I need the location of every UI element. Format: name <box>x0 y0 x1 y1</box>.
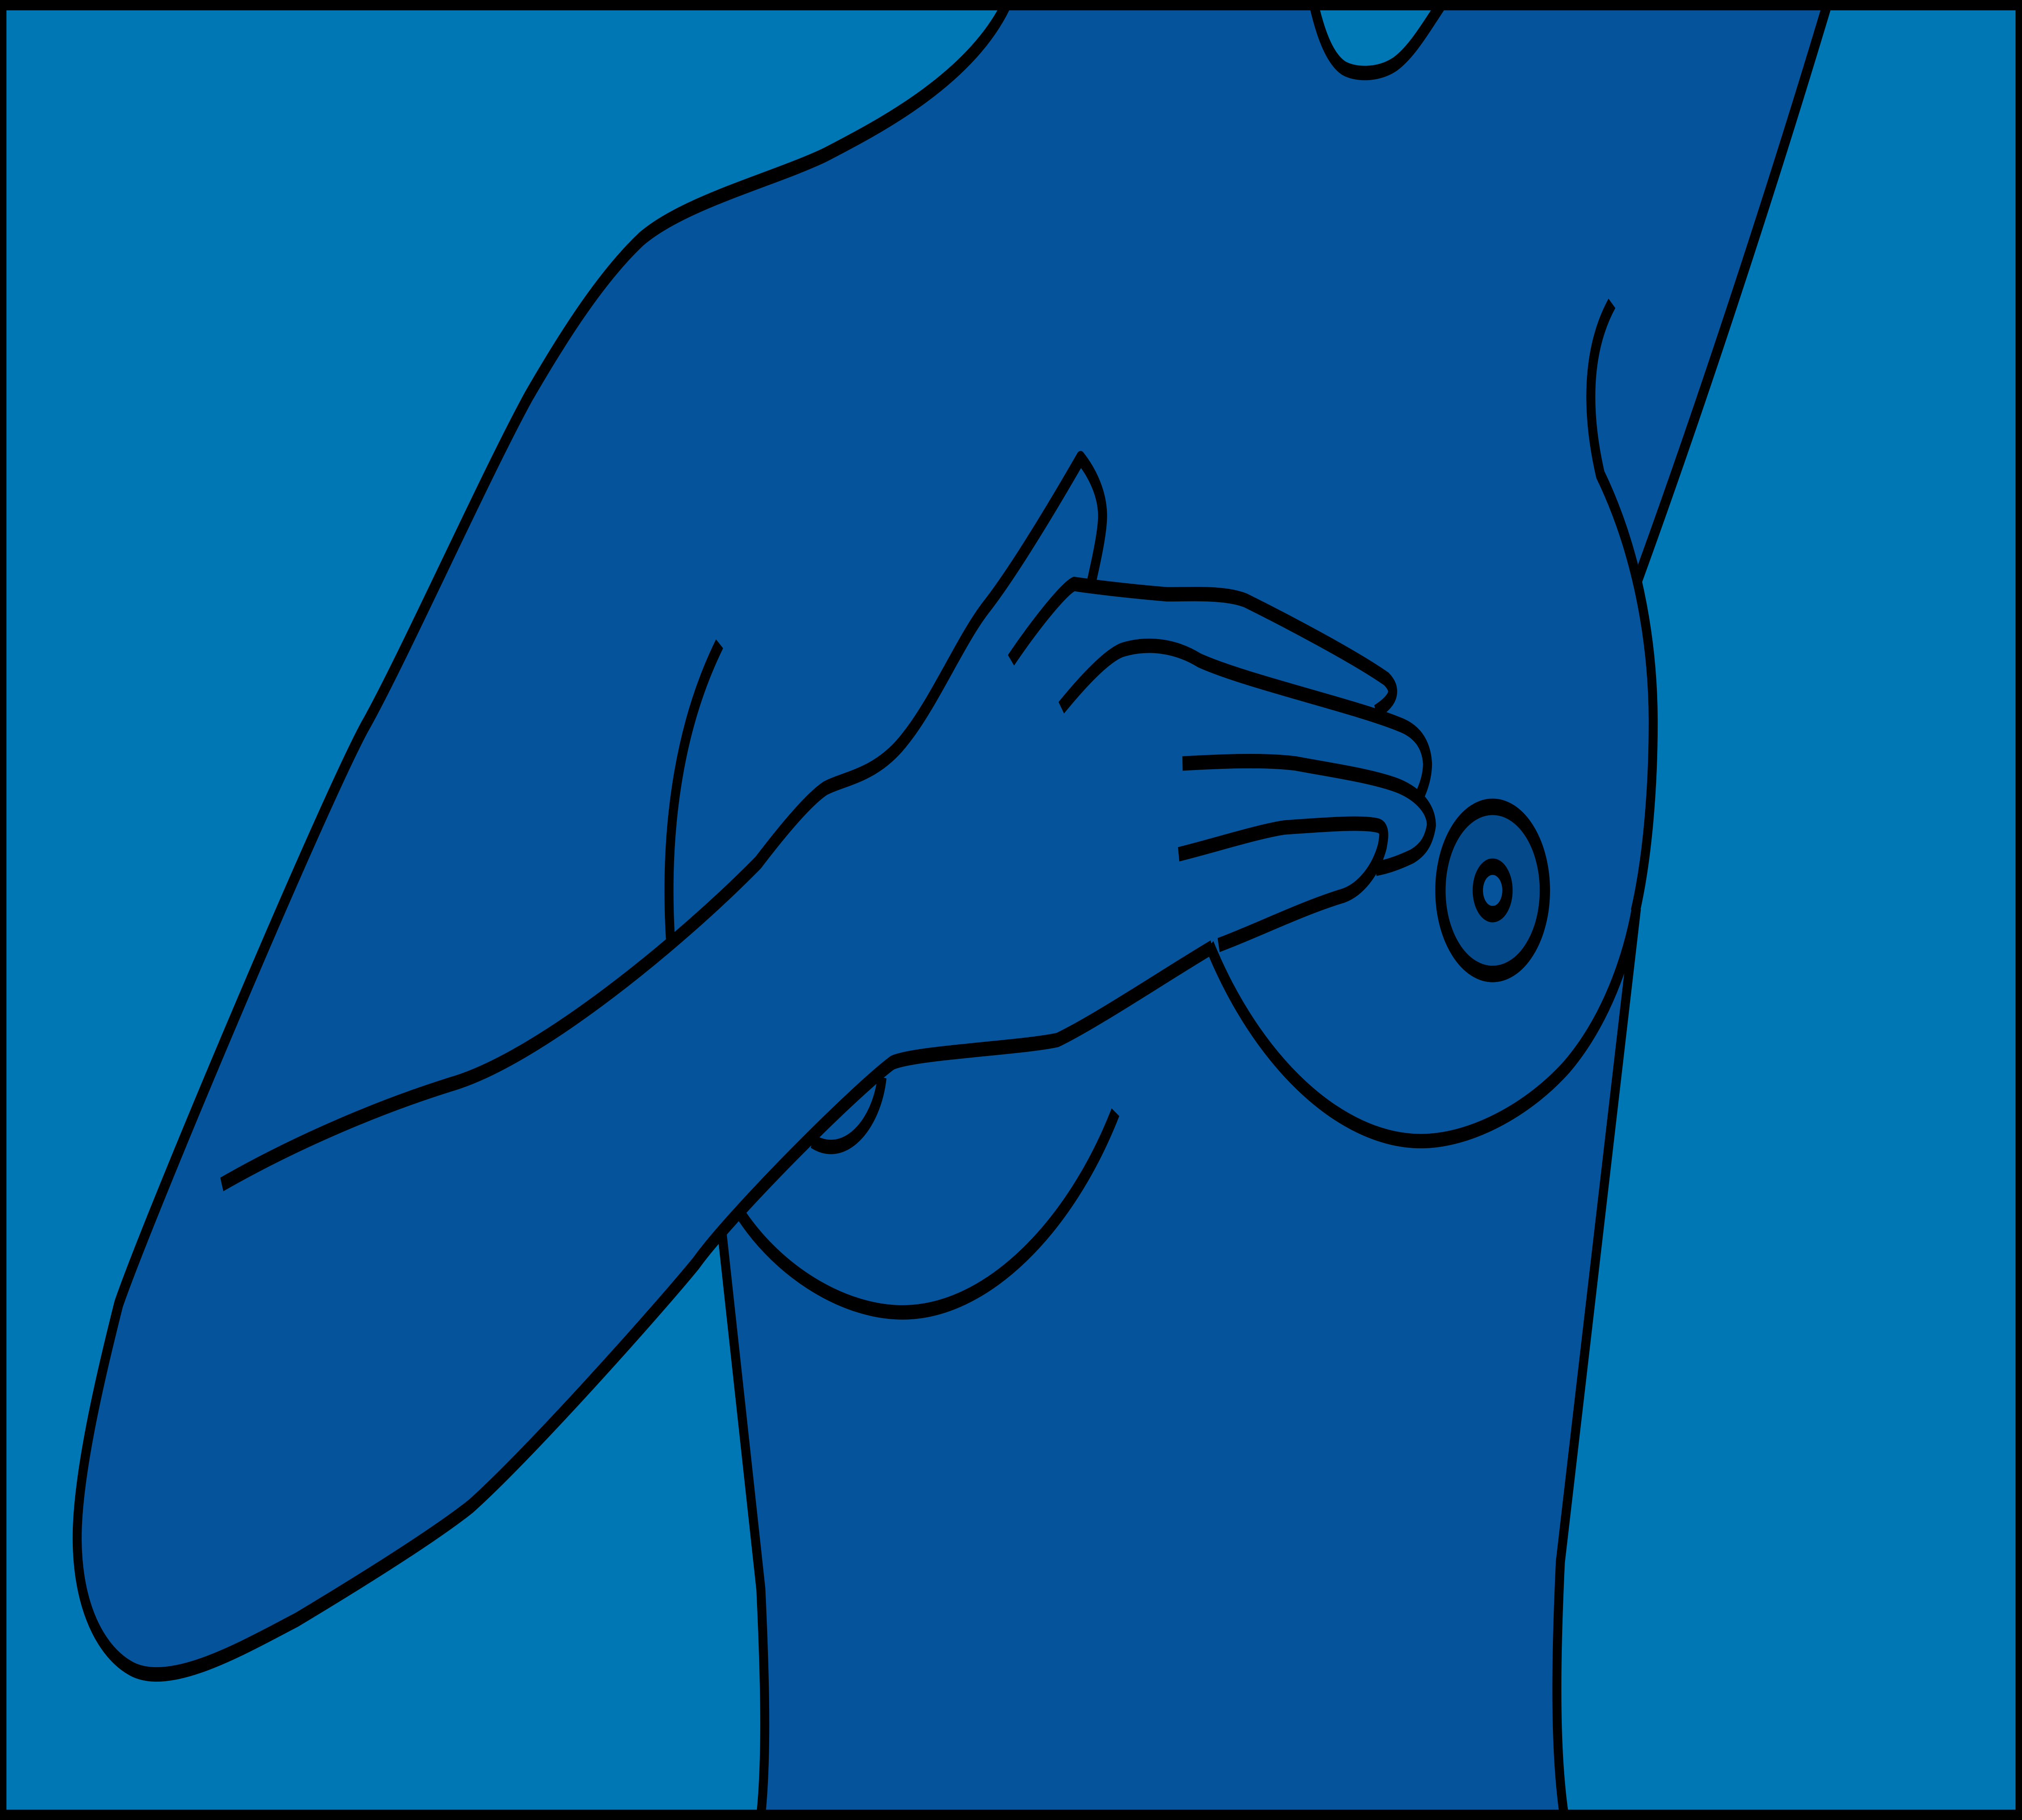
neckline <box>1313 0 1444 73</box>
finger two <box>1061 646 1428 801</box>
lower left torso edge <box>722 1234 765 1816</box>
armpit and right side of torso <box>1638 0 1829 580</box>
finger one <box>1011 584 1393 712</box>
finger three <box>1182 761 1432 869</box>
nipple <box>1478 867 1508 914</box>
chest crease <box>669 644 719 941</box>
right breast lower curve <box>1210 908 1637 1141</box>
lower right torso edge <box>1557 908 1637 1816</box>
armpit crease <box>1591 303 1653 912</box>
nipple and areola <box>1440 807 1545 974</box>
areola <box>1440 807 1545 974</box>
forearm upper edge <box>222 458 1102 1185</box>
left breast lower curve <box>742 1112 1115 1312</box>
finger four <box>1179 823 1384 945</box>
left arm and shoulder outline <box>77 0 1212 1674</box>
inner fold of forearm <box>812 1077 882 1147</box>
